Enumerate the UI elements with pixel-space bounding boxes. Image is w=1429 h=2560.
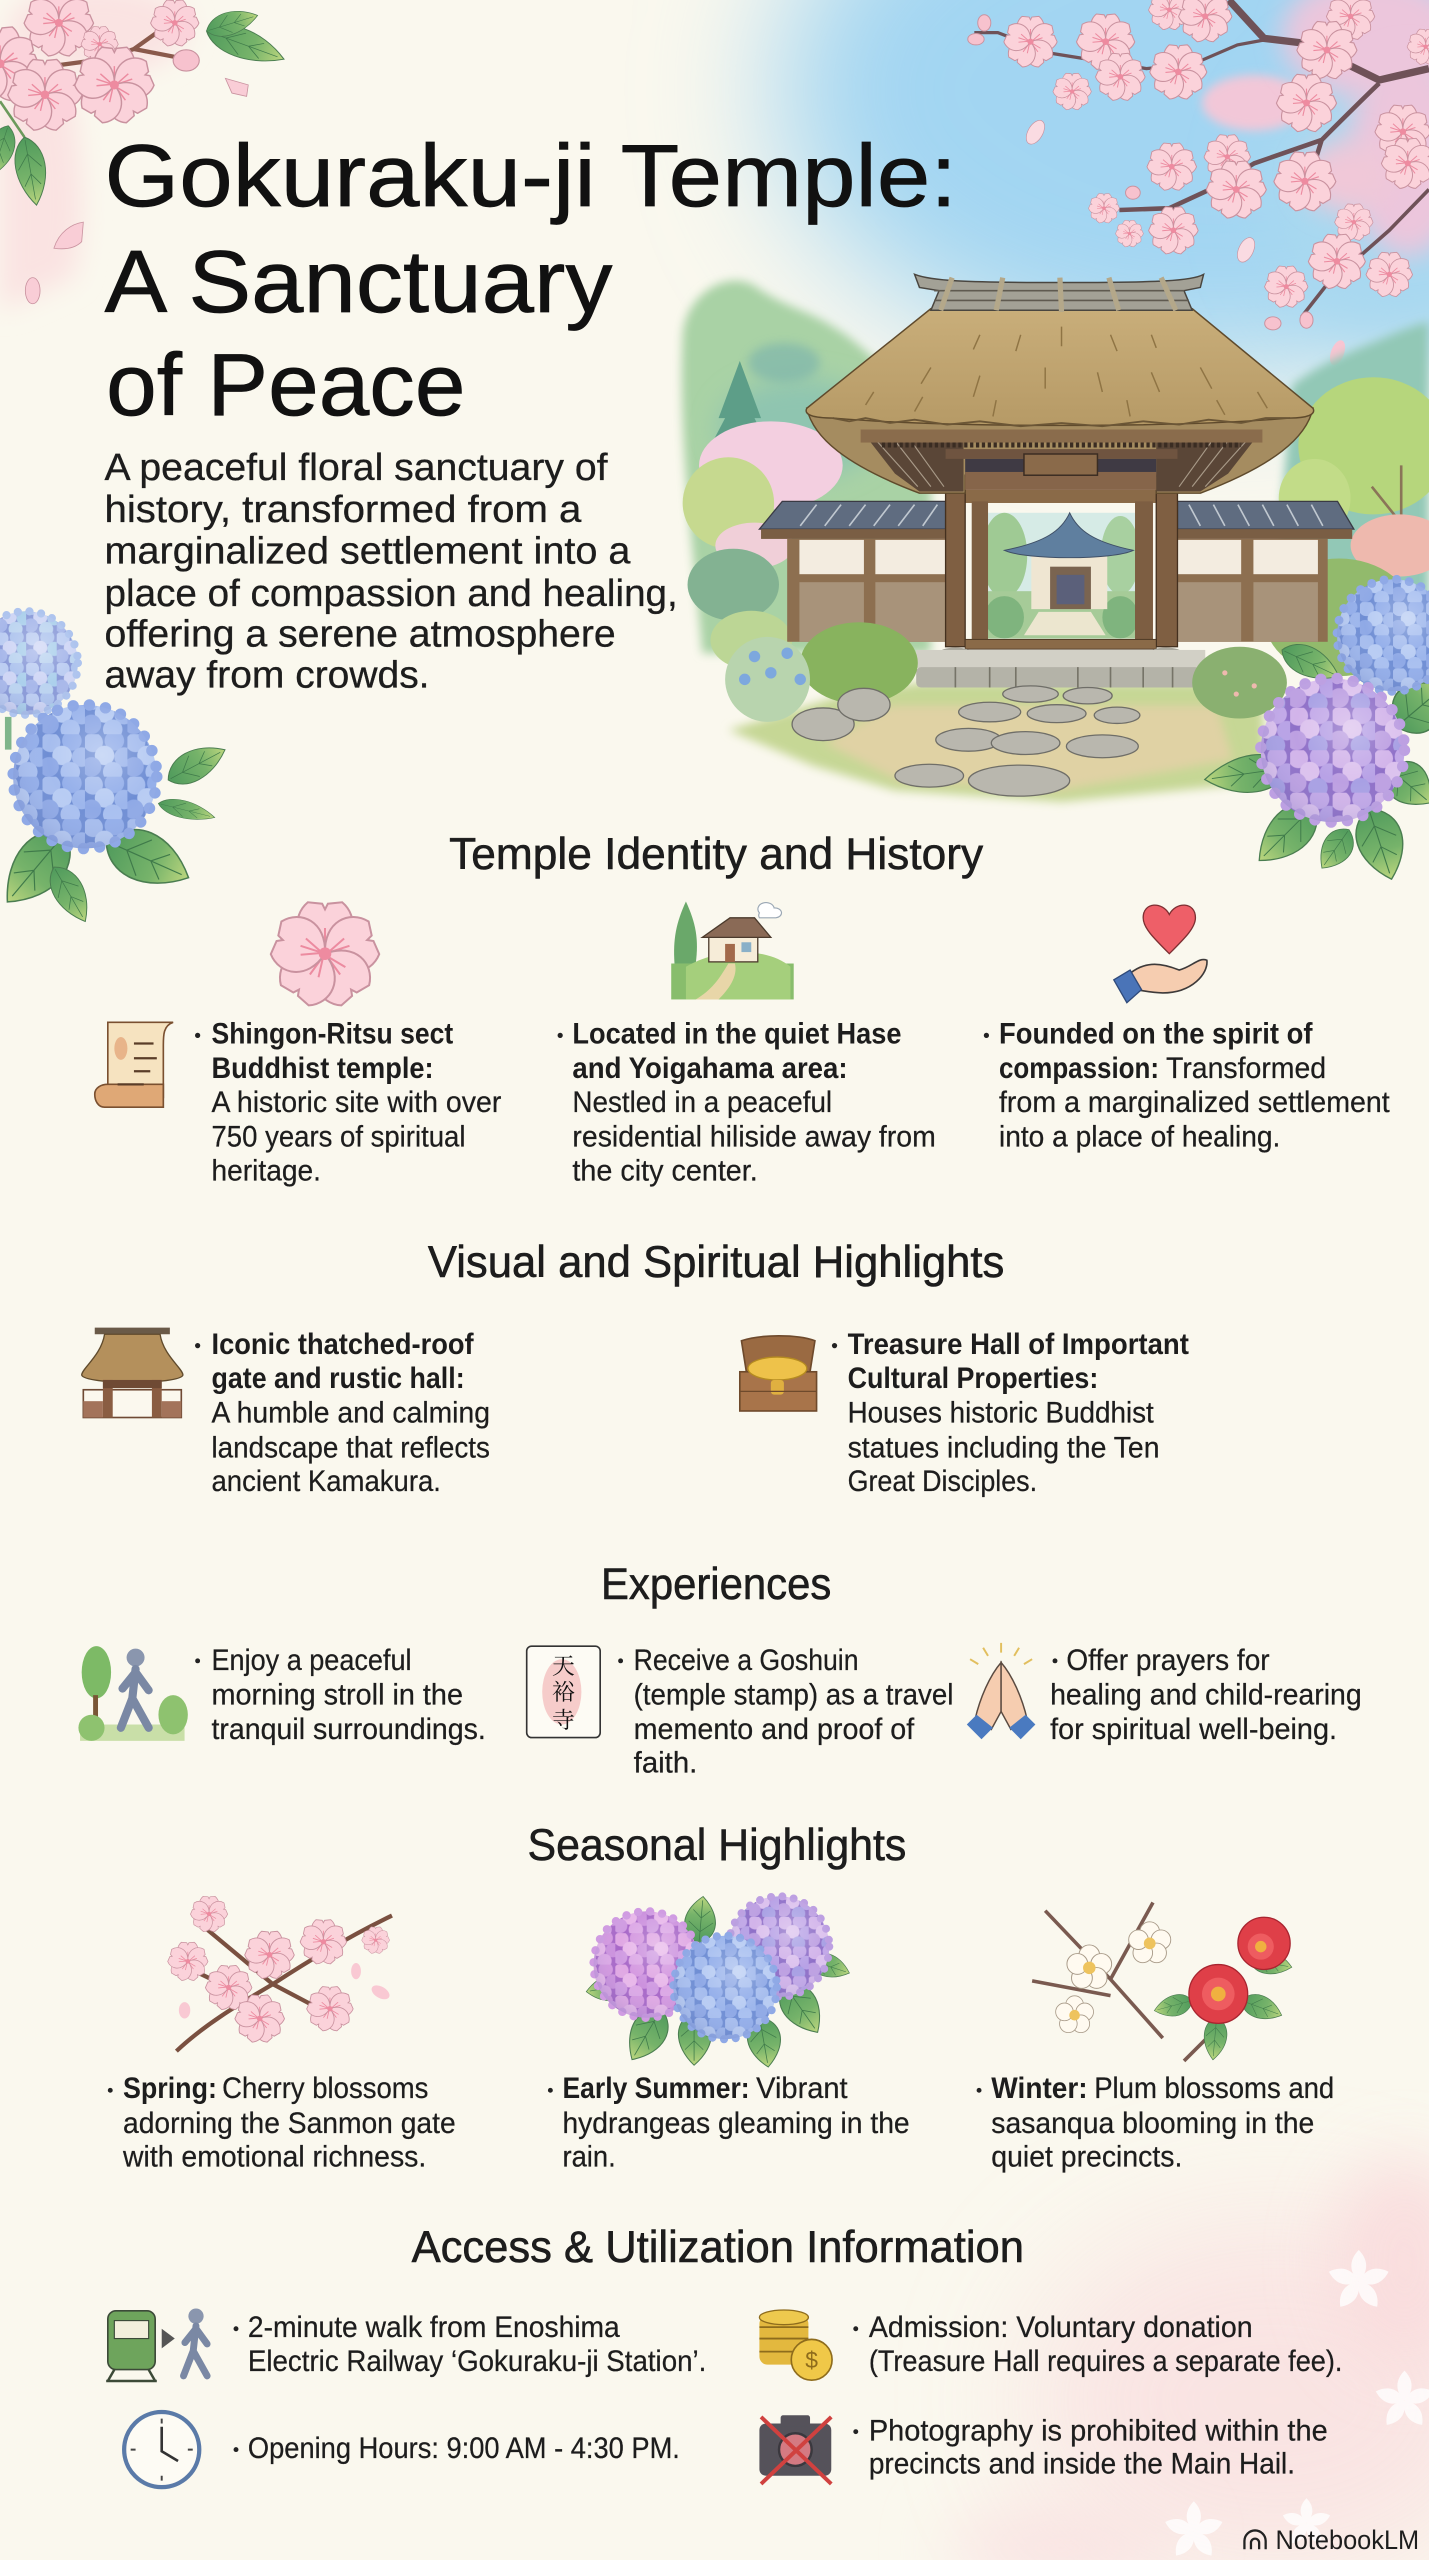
text: admission: (Treasure Hall requires a separate fee). (869, 2345, 1342, 2378)
heading: access and utilization: Access & Utilization Information (412, 2223, 1024, 2272)
icon: person strolling (78, 1646, 188, 1741)
icon: treasure chest (740, 1336, 817, 1411)
illustration part: thatched roof (806, 274, 1314, 493)
text column: Founded on compassion (984, 1018, 1390, 1153)
icon: clock (124, 2412, 199, 2487)
text column: Shingon-Ritsu sect: Buddhist temple: (212, 1052, 434, 1085)
text column: treasure hall: Treasure Hall of Important (848, 1328, 1189, 1361)
illustration part: bushes and blue flowers (725, 622, 1287, 722)
icon: goshuin stamp: 天 (552, 1648, 575, 1681)
icon: goshuin stamp: 寺 (552, 1702, 575, 1735)
illustration part: ground (728, 683, 1266, 802)
text: admission (853, 2311, 1342, 2378)
text column: early summer (548, 2072, 910, 2174)
intro paragraph (105, 446, 678, 696)
text column: treasure hall: Great Disciples. (848, 1465, 1037, 1498)
text column: Shingon-Ritsu sect: 750 years of spiritual (212, 1120, 465, 1153)
text column: treasure hall: Houses historic Buddhist (848, 1396, 1154, 1429)
text column: goshuin: faith. (634, 1747, 697, 1780)
decoration: top-right cherry branch (968, 0, 1429, 367)
text column: early summer: hydrangeas gleaming in the (562, 2107, 910, 2140)
intro paragraph: marginalized settlement into a (105, 529, 631, 571)
text column: Shingon-Ritsu sect: heritage. (212, 1155, 321, 1188)
text column: winter (977, 2072, 1334, 2174)
text column: morning stroll: tranquil surroundings. (212, 1713, 486, 1746)
intro paragraph: place of compassion and healing, (105, 572, 678, 614)
illustration part: side walls (759, 501, 1354, 642)
icon: praying hands (967, 1643, 1035, 1739)
illustration: spring cherry spray (166, 1896, 392, 2051)
text: admission: Admission: Voluntary donation (869, 2311, 1253, 2344)
text column: Located in Hase: residential hiliside away from (572, 1120, 936, 1153)
text column: spring: Spring: (123, 2072, 217, 2105)
illustration part: background hills and trees (682, 281, 1429, 676)
text column: morning stroll: morning stroll in the (212, 1678, 463, 1711)
title: of Peace (106, 335, 465, 434)
text: train access: Electric Railway ‘Gokuraku-ji Station’. (248, 2345, 706, 2378)
title (105, 126, 957, 434)
text column: offer prayers (1050, 1644, 1362, 1746)
heading: visual and spiritual highlights: Visual and Spiritual Highlights (428, 1238, 1004, 1287)
text column: treasure hall: Cultural Properties: (848, 1362, 1098, 1395)
heading: seasonal highlights: Seasonal Highlights (528, 1821, 906, 1870)
text column: offer prayers: Offer prayers for (1066, 1644, 1270, 1677)
text column: treasure hall: statues including the Ten (848, 1432, 1160, 1465)
text column: Located in Hase: the city center. (572, 1155, 758, 1188)
text column: Founded on compassion: Founded on the spirit of (999, 1018, 1313, 1051)
illustration part: view through the gate (982, 513, 1140, 639)
intro paragraph: offering a serene atmosphere (105, 613, 616, 655)
text column: Founded on compassion: into a place of healing. (999, 1120, 1280, 1153)
text column: thatched roof gate: Iconic thatched-roof (212, 1328, 474, 1361)
text column: early summer: rain. (562, 2141, 616, 2174)
text: photography rules (853, 2414, 1328, 2481)
text column: thatched roof gate: A humble and calming (212, 1396, 490, 1429)
illustration part: stepping stones and rocks (792, 686, 1140, 796)
text column: offer prayers: healing and child-rearing (1050, 1678, 1362, 1711)
title: A Sanctuary (105, 232, 612, 331)
text column: thatched roof gate: landscape that reflects (212, 1432, 490, 1465)
icon: cherry blossom (268, 902, 382, 1012)
icon: paper scroll (95, 1022, 173, 1107)
text column: early summer: Vibrant (756, 2072, 848, 2105)
text column: Founded on compassion: Transformed (1166, 1052, 1326, 1085)
text column: goshuin: (temple stamp) as a travel (634, 1678, 953, 1711)
icon: coins (759, 2310, 832, 2380)
text column: treasure hall (832, 1328, 1189, 1498)
heading: experiences: Experiences (601, 1560, 831, 1609)
illustration: thatched temple gate in a garden (682, 274, 1429, 802)
text column: thatched roof gate: ancient Kamakura. (212, 1465, 441, 1498)
illustration part: gate posts and beams (939, 449, 1182, 659)
text column: Located in Hase: and Yoigahama area: (572, 1052, 848, 1085)
text column: Shingon-Ritsu sect: Shingon-Ritsu sect (212, 1018, 453, 1051)
text column: spring: with emotional richness. (122, 2141, 426, 2174)
text column: winter: Winter: (991, 2072, 1088, 2105)
text: train access (234, 2311, 706, 2378)
text column: Founded on compassion: from a marginalized settlement (999, 1086, 1390, 1119)
icon: train, arrow and walker (106, 2309, 207, 2381)
text column: thatched roof gate (195, 1328, 490, 1498)
text column: Located in Hase: Nestled in a peaceful (572, 1086, 832, 1119)
text: opening hours: Opening Hours: 9:00 AM - 4:30 PM. (248, 2432, 680, 2465)
icon: goshuin stamp (527, 1646, 600, 1738)
text column: goshuin: Receive a Goshuin (634, 1644, 859, 1677)
icon: no-photography camera (759, 2415, 831, 2484)
icon: coins: $ (805, 2347, 818, 2373)
text: photography rules: precincts and inside the Main Hail. (869, 2448, 1295, 2481)
text column: morning stroll (195, 1644, 486, 1746)
intro paragraph: history, transformed from a (105, 488, 582, 530)
icon: heart above open hand (1114, 905, 1207, 1003)
text: photography rules: Photography is prohibited within the (869, 2414, 1328, 2447)
text column: thatched roof gate: gate and rustic hall: (212, 1362, 465, 1395)
icon: goshuin stamp: 裕 (552, 1674, 575, 1707)
text column: winter: Plum blossoms and (1094, 2072, 1334, 2105)
heading: temple identity: Temple Identity and History (449, 830, 983, 879)
logo: NotebookLM: NotebookLM (1275, 2525, 1419, 2555)
intro paragraph: A peaceful floral sanctuary of (105, 446, 608, 488)
decoration: left hydrangeas (0, 611, 232, 929)
text column: early summer: Early Summer: (562, 2072, 750, 2105)
decoration: bottom-right white blossoms (1163, 2250, 1429, 2560)
text column: offer prayers: for spiritual well-being. (1050, 1713, 1337, 1746)
icon: thatched gate (82, 1328, 183, 1418)
text column: goshuin (618, 1644, 953, 1780)
icon: house on a hill (671, 901, 794, 999)
decoration: right hydrangeas (1202, 579, 1429, 886)
text column: Shingon-Ritsu sect: A historic site with over (212, 1086, 502, 1119)
decoration: top-left cherry blossoms (0, 0, 289, 304)
illustration part: stone base (916, 650, 1205, 688)
text column: Located in Hase (558, 1018, 936, 1188)
illustration: winter plum and sasanqua (1032, 1903, 1294, 2061)
intro paragraph: away from crowds. (105, 654, 430, 696)
text column: morning stroll: Enjoy a peaceful (212, 1644, 412, 1677)
text column: winter: quiet precincts. (991, 2141, 1182, 2174)
text column: Located in Hase: Located in the quiet Hase (572, 1018, 901, 1051)
text column: spring: Cherry blossoms (222, 2072, 428, 2105)
text column: Founded on compassion: compassion: (999, 1052, 1159, 1085)
text column: goshuin: memento and proof of (634, 1713, 915, 1746)
title: Gokuraku-ji Temple: (105, 126, 957, 225)
illustration: early summer hydrangeas (584, 1895, 853, 2070)
text column: spring: adorning the Sanmon gate (123, 2107, 456, 2140)
text: train access: 2-minute walk from Enoshima (248, 2311, 620, 2344)
text column: spring (108, 2072, 456, 2174)
text column: winter: sasanqua blooming in the (991, 2107, 1314, 2140)
text column: Shingon-Ritsu sect (195, 1018, 502, 1188)
